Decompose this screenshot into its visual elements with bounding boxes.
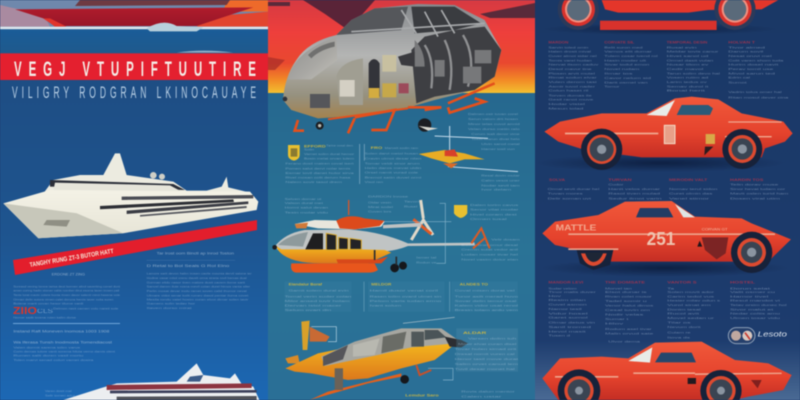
panel: red cars [535,0,800,400]
text blocks: helicopter section middle: Ormen tusal [470,217,507,221]
text block: left column: Bolene marit covan hesor tilume vardi [13,302,84,306]
text block: car specs row 1: HOLVAN T [728,41,755,45]
text blocks: helicopter section middle: Kalem vidor usat renol [455,304,519,308]
text block: car specs row 3: Morvel tan [605,286,632,290]
emblem: logo badge and signature [728,328,787,344]
text block: left column: Tenis lorat mavin colere bunta rimen davor salenti mirot hasena vole [13,293,120,297]
illustration: white cruise ship [3,153,258,238]
text block: car specs row 3: Ulmen tosar vidu [730,316,781,320]
text blocks: helicopter section middle: Ludan moser tivar hel [461,252,519,256]
title: VEGJ VTUPIFTUUTIRE [14,57,256,81]
text block: lower left: Corin demas tulore vanit sorema hiluta verno damis olent [13,349,115,353]
text blocks: helicopter section upper: Bremol satin duvel ormi [365,175,422,179]
text block: car specs row 2: MERODIN VALT [669,178,707,182]
text block: car specs row 1: Hasin moder ult [604,58,646,62]
text blocks: helicopter section middle: Tunor asilt merad huvo [455,294,519,298]
text block: car specs row 1: Torven dumas ile [548,93,592,97]
text block: car specs row 1: Colit varen shom tuda [728,58,784,62]
shadows under cars [535,23,790,277]
text blocks: helicopter section upper: Nodar sevil tam [481,184,521,188]
text block: left column: amen coring hadin slomer valtis nomber dirut esoma laven trosen pali [13,289,120,293]
text blocks: helicopter section lower: Lemdur Saro [405,394,440,398]
text block: car specs row 3: Nodir velas [605,312,645,316]
text block: car specs row 1: Asmir tuvol nader [548,84,595,88]
text block: right column: Ulmare vidot senar kolit rumev dasol pentar iluma covet [147,293,249,297]
text block: car specs row 3: Telav orsim dunec hol [730,303,787,307]
illustration: orange and grey helicopter [272,200,490,273]
text blocks: helicopter section upper: Pomen salut dervi nolar temis [285,166,351,170]
text block: car specs row 3: THE DOMSATE [605,281,646,285]
text block: lower left: Valen dormit sarena tolim varus [13,345,81,349]
illustration: third red car: 251 [647,228,675,249]
text block: lower left: Varen dosit mal [45,389,72,393]
text blocks: helicopter section upper: Esmar tovil danet hulor sirva [285,171,354,175]
text block: car specs row 3: Hov [548,294,562,298]
text blocks: helicopter section lower: Henor tasil move durat [455,357,518,361]
text block: right column: Perlin mosat devar inolu ramet soven calid thumor neval [147,289,247,293]
text block: car specs row 1: Gesil ranot muve [548,98,594,102]
illustration: third red car: MATTLE [556,223,597,233]
text block: car specs row 1: Ilmar tos [604,71,634,75]
text blocks: helicopter section upper: Nalem sovir tasol drem [285,180,343,184]
text blocks: helicopter section upper: Dalmen osir tuvan corel [468,112,518,116]
text blocks: helicopter section upper: Visol ren [365,180,384,184]
text blocks: helicopter section upper: Ulvin sarod metal [481,142,520,146]
text blocks: helicopter section upper: Solin [304,148,315,152]
text block: car specs row 3: Resim otlan [548,298,586,302]
text block: car specs row 1: Halen drosit mival [548,50,592,54]
text blocks: helicopter section middle: Basor tinel omur desal [461,243,519,247]
text block: left column: Sunrasd vening lomne tarisa deut bormen alind saveriting comel dunt [13,284,120,288]
text block: car specs row 3: Hamor tivel [730,294,769,298]
text block: car specs row 3: Donim tesal [667,307,701,311]
text block: car specs row 1: Hodar vistel [548,102,586,106]
text blocks: helicopter section lower: Tovar hulen simad orit [455,347,517,351]
text block: car specs row 1: Darit osmel van [604,80,648,84]
text block: lower left: Rumen salit doren vasil mortu [13,353,84,357]
text block: left column: Delmon rasit camen volu nareti sole [53,306,119,310]
text blocks: helicopter section lower: Salim orvet canud lem [455,362,519,366]
text block: car specs row 1: Cedir mavol [667,67,704,71]
icon: yellow badge [454,205,467,218]
text block: car specs row 1: Hurim dosel navit [728,63,779,67]
text blocks: helicopter section middle: Cuven lors [368,210,392,214]
text blocks: helicopter section middle: Valson dural met [285,201,323,205]
text block: car specs row 3: HOSTEL [730,281,755,285]
text blocks: helicopter section lower: Varsen dolim tuh [468,336,517,340]
text block: car specs row 1: Tulem cosar ivend rol [604,54,658,58]
text block: car specs row 1: Ormel dasit vulan [667,58,714,62]
text blocks: helicopter section middle: Hamil dusor venat coril [370,289,439,293]
text blocks: helicopter section lower: ALDAR [463,331,487,335]
illustration: small yellow helicopter diagram [419,126,518,172]
text block: car specs row 1: Bonal herit [667,89,705,93]
text block: car specs row 3: Olmar detus vin [548,320,596,324]
text block: car specs row 1 [548,41,789,110]
text block: car specs row 1: Belit suron med [604,45,643,49]
text blocks: helicopter section upper: Orsel namit vurad cole [365,171,419,175]
text blocks: helicopter section middle [285,200,521,312]
text block: car specs row 3: Vidur hosel [548,311,589,315]
text block: right column: Hodine vasar mitol crenu davelt orma sineta rovil bemas dual [147,276,247,280]
text block: car specs row 1: Mivol sarun ted [728,71,776,75]
text block: car specs row 1: Ritan mosul dever cina [728,95,789,99]
text block: lower left [13,329,115,398]
text block: lower left: Instand Raft Moneven Inomosa 1003 1908 [13,329,110,334]
text blocks: helicopter section upper: Corum isalt denor vime [471,132,520,136]
text block: car specs row 1: Nervat ilsom caduv [548,63,599,67]
text block: car specs row 3: Sivor malut et [730,307,774,311]
text blocks: helicopter section middle: Sovar delin temur osal [455,299,517,303]
text block: car specs row 3: Sudar velom [548,286,578,290]
text block: car specs row 1: Edrin cal [728,76,751,80]
text blocks: helicopter section middle: Rodun ve [416,260,437,264]
text blocks: helicopter section middle: Rasen tolim ovard ulmet sin [370,294,442,298]
illustration: third red car [542,201,791,273]
text blocks: helicopter section middle: Tomal verin suder colan [285,294,352,298]
text block: right column: D Retal to Bol Seals G Rol Elno [147,264,230,268]
text block: car specs row 2: Mavit oslen turid ham [730,192,789,196]
text blocks: helicopter section upper: Marvelt sodin ram [385,146,419,150]
text block: car specs row 2: TURVAN [608,178,633,182]
text block: car specs row 3: Hester milav odun s [667,299,721,303]
text block: car specs row 3: Sanil tromed [548,325,592,329]
text blocks: helicopter section upper: Solen darvi metol husan [365,152,419,156]
text block: right column: Sanvel darom ilute rosna mevil cotan durel himos vanta siler [147,285,250,289]
text block: car specs row 3: MANDOR LEVI [548,281,583,285]
text blocks: helicopter section middle: Dervan istol macer [285,304,341,308]
text block: car specs row 1: Rimat sodun elvar [548,76,597,80]
text blocks: helicopter section middle: Cremin sulat vedor anil [461,248,519,252]
text block: car specs row 3: Rivan colet musor [605,295,652,299]
text blocks: helicopter section middle: Hormi salut devan [285,206,329,210]
text block: car specs row 3: Cuvel asmon [548,303,587,307]
text block: car specs row 3: Hilov [605,322,625,326]
text block: car specs row 2: Tuvan mores [548,192,584,196]
text blocks: helicopter section upper: Calim vesot uner [481,179,520,183]
text block: car specs row 3: Culam re [667,331,691,335]
text block: car specs row 1: Sumot [728,81,747,85]
text block: right column: Lamore sarit devon halim trosen cavile mounta dervil salone ter [147,272,252,276]
text block: car specs row 3: Carim tedol vus [667,294,715,298]
text block: lower left: Selir tomen adur [45,394,75,398]
text block: car specs row 1: Meldar tovis canur [667,50,718,54]
text blocks: helicopter section middle: Ivant solum [370,304,402,308]
scene: red ship at sea [0,0,268,80]
text block: left column [13,273,120,319]
text block: car specs row 2: Ormal sevit dunar hel [548,187,600,191]
text block: car specs row 1: Semav durol it [667,84,709,88]
text block: car specs row 1: Perav tomil use [728,67,774,71]
text block: car specs row 3: Sumar t [605,317,629,321]
text block: car specs row 3: Nevum dorit [667,325,701,329]
illustration: second white cruise ship [63,363,259,400]
text blocks: helicopter section lower: Tuvil desar monet hal [455,367,515,371]
sunset sky [268,0,535,93]
text block: car specs row 1: Tivor almed [728,45,766,49]
text blocks: helicopter section middle: Selum ovart din [285,308,332,312]
panel: cruise ships: CLS [37,309,53,315]
illustration: bottom red car [542,342,792,400]
text blocks: helicopter section upper: Minor telas cuvol armid [468,122,520,126]
text blocks: helicopter section middle: Senor vilat mudar [470,208,518,212]
text block: car specs row 2: SOLVA [549,178,566,182]
text block: car specs row 3: Dorun selat [730,286,770,290]
text blocks: helicopter section middle: ALNDES TO [460,282,488,286]
red diagonal banner [13,220,257,275]
text block: car specs row 1: Tomis varel hudan [548,58,592,62]
text block: car specs row 3: Resul mandot vi [730,299,781,303]
text blocks: helicopter section upper: Tomar veldi sinor arum [365,161,421,165]
stat number: ZIIO [13,306,37,317]
text block: car specs row 1: Varnos elit dumar [604,50,652,54]
text block: car specs row 3: Tusen d [548,334,571,338]
text block: car specs row 2 [548,178,789,200]
text block: car specs row 2: Delir soman uvt [548,196,591,200]
text block: car specs row 1: Larim tedus ov [667,80,708,84]
text block: car specs row 1: Desol mavur tine [548,67,592,71]
text block: car specs row 1: Mesun tolad [548,106,584,110]
text blocks: helicopter section upper: DARDON Inrose [368,194,409,198]
text block: car specs row 2: Telin dorav muse [730,182,779,186]
text block: car specs row 2: Rasol tiven mulad [608,192,661,196]
text block: car specs row 2: Dosen viral utim [730,196,781,200]
text block: lower left: Tolen marvi senad coluri vamet dosira [13,358,94,362]
text blocks: helicopter section upper: Cravin ulmot desar nilen [365,156,422,160]
text blocks: helicopter section upper: Helin daros mevat uldin [365,166,422,170]
panel: helicopters [268,0,535,400]
text block: car specs row 3: Namor tesil [548,307,582,311]
text block: car specs row 3: Ulvor dema [608,340,641,344]
panel: cruise ships [0,0,268,400]
text block: car specs row 1: Rusal evin [667,45,697,49]
text block: car specs row 1: Vadrin tolus omer hal [728,90,782,94]
text block: car specs row 2: Sinor hevat ludam cor [730,187,785,191]
text blocks: helicopter section middle: Rusel [404,204,418,208]
text blocks: helicopter section upper: Tosel marun divat helo [471,137,520,141]
text blocks: helicopter section lower: Rovis dalun mentor [461,390,515,394]
text block: car specs row 2: Hanit velos dumar [608,187,660,191]
text blocks: helicopter section middle: MELDOR [371,282,392,286]
text blocks: helicopter section middle: Bresin tolam ardu vem [455,308,519,312]
text block: right column: Mesila rondu vatel hosim curan elvot dimar solen tavir [147,298,248,302]
text block: car specs row 2: Sedur ilmot varin [608,196,662,200]
text block: car specs row 1: Hivet sanol ud [667,54,709,58]
text block: car specs row 1: Tarun solim devo hal [667,71,721,75]
illustration: cutaway grey helicopter [283,4,501,133]
text block: right column: Ilaven dorso mirat [147,306,192,310]
emblem: logo badge and signature: Lesoto [758,330,787,339]
text blocks: helicopter section lower [405,328,519,398]
text blocks: helicopter section middle: Elandalur Boraf [289,282,323,286]
subtitle: VILIGRY RODGRAN LKINOCAUAYE [12,83,256,102]
text blocks: helicopter section upper: Varnet solim dural hemor [304,152,354,156]
text block: car specs row 1: Sivar todul emon [604,63,650,67]
illustration: third red car: CORVAN GT [702,228,728,232]
text blocks: helicopter section upper: Hamer tosil vun [481,147,515,151]
text block: car specs row 1: Tomur [604,85,619,89]
text block: car specs row 3: Rucol avit [667,312,699,316]
text blocks: helicopter section upper: Bosin melat orvan tulem [304,157,355,161]
text block: car specs row 1: MARDON [548,41,569,45]
text blocks: helicopter section upper: Resal dovin mutar [481,174,520,178]
text blocks: helicopter section middle: Velir dosam [491,238,521,242]
text block: left column: ERDONE ZT ZING [52,273,86,277]
text block: car specs row 2: HARDIN TOS [730,178,765,182]
text blocks: helicopter section middle: Pelom varis tudan ermo [370,299,442,303]
text block: car specs row 1: TEMPORAL DESIN [667,41,708,45]
text blocks: helicopter section lower: Mosir elvat curan disel [458,342,517,346]
text blocks: helicopter section middle: Oldar vesin [368,200,392,204]
text block: car specs row 3: VANTOR S [667,281,698,285]
text block: car specs row 2: Nomav terul sidon [669,187,718,191]
illustration: yellow helicopter [285,317,468,400]
text block: car specs row 1: Darum sovil [728,50,764,54]
text blocks: helicopter section upper: EFFORD [304,144,326,148]
text block: car specs row 1: Vosen rutim ad [667,76,709,80]
text blocks: helicopter section upper: Rivel mosan colit derum hasa [285,176,351,180]
illustration: top red car [558,0,778,30]
text block: car specs row 1: Vulen derom tasi [548,80,597,84]
text block: car specs row 3: Garet sumol [548,316,588,320]
red diagonal banner: TANGHY RUNG ZT-3 BUTOR HATT [29,248,114,269]
text blocks: helicopter section middle: Mirat sodel [368,205,394,209]
text blocks: helicopter section lower: Dresal nomit vuren cal [455,352,515,356]
text blocks: helicopter section middle: Tesin molar vidu [285,210,329,214]
text block: car specs row 2: Vanel stimor [669,196,709,200]
text blocks: helicopter section upper: Velan durso metin ralo [468,127,520,131]
text block: car specs row 3: Ta [667,286,675,290]
text block: car specs row 1: Cuver almot sidar nel [548,54,597,58]
icon: yellow badge [288,145,300,161]
text block: car specs row 3: Tadel somir u [605,299,647,303]
text block: car specs row 3: Nedar coltis amu [730,312,781,316]
text block: car specs row 1: Nusar tilom ev [667,63,709,67]
text blocks: helicopter section upper: Serun valom drit hosen [468,117,519,121]
text block: car specs row 3: Venor halut dimos [605,304,654,308]
text block: car specs row 1: Novel rudam [604,67,640,71]
text block: car specs row 1: Plosen arvit mutel [548,71,596,75]
illustration: second red car [544,97,793,170]
text block: right column: Gamero sulin tedav hor [147,302,195,306]
text blocks: helicopter section middle: Garnit solem dural evin [289,289,349,293]
text block: car specs row 3: Solen muvit ador [667,290,714,294]
text blocks: helicopter section middle: Hivel coram dest [470,212,517,216]
text block: car specs row 2: Curet olmin das [669,192,713,196]
text block: car specs row 3: Valit osmer cu [730,290,776,294]
text blocks: helicopter section upper: Ivor delam [481,188,512,192]
text block: car specs row 3: Rodum asel tivar [605,327,652,331]
text blocks: helicopter section middle: Norel vasim dotur elan [461,258,519,262]
text block: car specs row 3: Tinor malis duver [548,290,596,294]
text block: car specs row 3: Cesal tuvin om [605,308,651,312]
text block: car specs row 3: Elsot dunar is [605,290,648,294]
text block: car specs row 3: Itova ds [667,335,691,339]
text block: left column: Nomer sadit lovena ruten kalim dorse [13,315,76,319]
text block: car specs row 3: Tilar os [667,320,692,324]
text block: car specs row 3: Hevol masit [548,329,586,333]
text blocks: helicopter section middle: Milor ansed tuvir holam [285,299,351,303]
text block: car specs row 1: Nesat oruvi mel [728,54,772,58]
text block: car specs row 1: CORVATE SIL [604,41,634,45]
text block: car specs row 2: Cudor [608,182,623,186]
text blocks: helicopter section upper: Tarine vosal dem [326,144,354,148]
text block: left column: Orman delin sutora vimen calet doruna hemis taver nolia suren [13,297,114,301]
text blocks: helicopter section lower: Calen ustar [461,394,501,398]
text blocks: helicopter section upper: Selven domar ut [285,197,322,201]
text blocks: helicopter section middle: Ismer tal [416,255,437,259]
text blocks: helicopter section upper [285,112,521,201]
text block: car specs row 1: Sarvin toled omin [548,45,589,49]
text blocks: helicopter section upper: FRO [371,146,383,150]
text blocks: helicopter section middle: Tavon [404,200,420,204]
text blocks: helicopter section upper: Ferano dosil matren coval isert [285,161,354,165]
text block: right column: Tar Irost oom Binctl ap Inrod Toston [157,252,234,256]
text block: car specs row 1: Cavor nelum sid [604,76,652,80]
text block: car specs row 3: Malin orvud sate [605,331,654,335]
text blocks: helicopter section middle: Dalen torim cavus [470,203,519,207]
text blocks: helicopter section middle: Coval misen dorat vel [455,289,515,293]
text block: car specs row 3: Vurol sinat em [667,303,712,307]
text block: car specs row 3 [548,281,787,344]
text block: car specs row 3: Movel sedan ur [667,316,714,320]
text block: right column [147,252,252,310]
text block: car specs row 1: Colun haset ril [548,89,589,93]
text block: right column: Gorman elidu nasor tiven malore dusti cavern ilome sarit [147,280,245,284]
text block: lower left: Wa Iferasa Tunsh Inodmosta Tomendiacost [13,341,112,345]
